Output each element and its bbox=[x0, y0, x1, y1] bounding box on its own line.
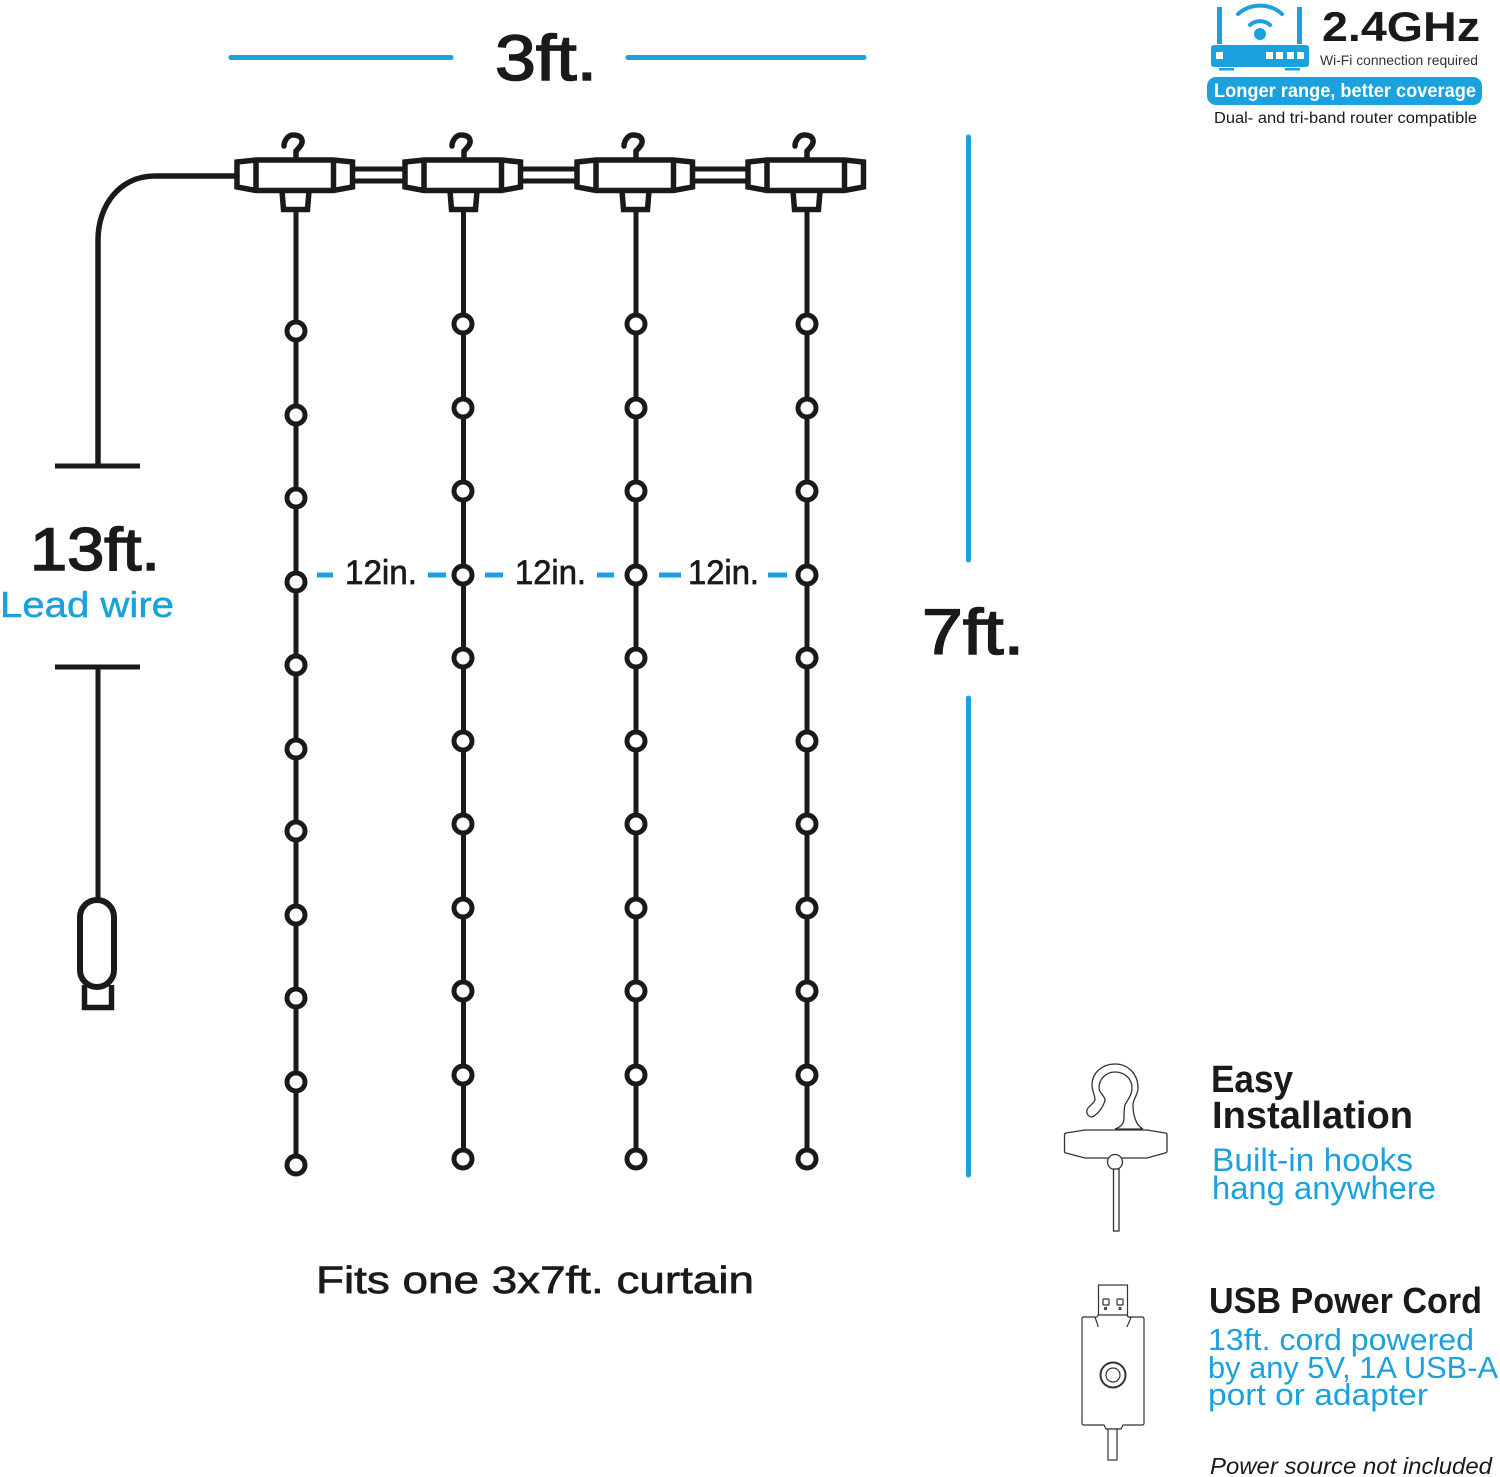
text: usb power cord: USB Power Cord bbox=[1209, 1280, 1482, 1321]
text: usb power cord bbox=[1208, 1280, 1498, 1412]
icon: hook bbox=[1064, 1064, 1167, 1231]
text: easy installation: Built-in hooks bbox=[1212, 1142, 1413, 1178]
text: usb power cord: by any 5V, 1A USB-A bbox=[1208, 1350, 1498, 1385]
strand 3 bbox=[577, 135, 692, 1168]
text: easy installation: Easy bbox=[1211, 1059, 1293, 1101]
text: router compatibility: Dual- and tri-band router compatible bbox=[1214, 110, 1477, 127]
strand 4 bbox=[748, 135, 864, 1168]
spacing labels: 12in bbox=[317, 554, 787, 592]
spacing labels: 12in: 12in. bbox=[515, 554, 586, 592]
text: easy installation bbox=[1211, 1059, 1436, 1206]
text: usb power cord: port or adapter bbox=[1208, 1377, 1428, 1412]
icon: wifi router bbox=[1211, 6, 1309, 71]
label: 13ft lead wire bbox=[0, 516, 174, 625]
badge: longer range: Longer range, better coverage bbox=[1214, 81, 1476, 102]
text: easy installation: hang anywhere bbox=[1212, 1170, 1436, 1206]
icon: usb power cord bbox=[1082, 1285, 1144, 1460]
strand 1 bbox=[237, 135, 352, 1174]
lead wire with plug bbox=[55, 176, 236, 1008]
heading: 2.4GHz bbox=[1320, 3, 1480, 68]
label: 13ft lead wire: 13ft. bbox=[30, 516, 160, 583]
heading: 2.4GHz: 2.4GHz bbox=[1322, 3, 1480, 50]
spacing labels: 12in: 12in. bbox=[345, 554, 417, 592]
caption: fits one curtain: Fits one 3x7ft. curtain bbox=[316, 1260, 754, 1302]
label: 13ft lead wire: Lead wire bbox=[0, 584, 174, 625]
heading: 2.4GHz: Wi-Fi connection required bbox=[1320, 52, 1478, 68]
text: easy installation: Installation bbox=[1212, 1095, 1413, 1137]
connector wires between controllers bbox=[354, 169, 747, 181]
dimension: 7ft height: 7ft. bbox=[922, 596, 1024, 668]
dimension: 3ft width: 3ft. bbox=[495, 22, 597, 94]
strand 2 bbox=[405, 135, 520, 1168]
text: usb power cord: 13ft. cord powered bbox=[1208, 1322, 1474, 1357]
spacing labels: 12in: 12in. bbox=[688, 554, 759, 592]
